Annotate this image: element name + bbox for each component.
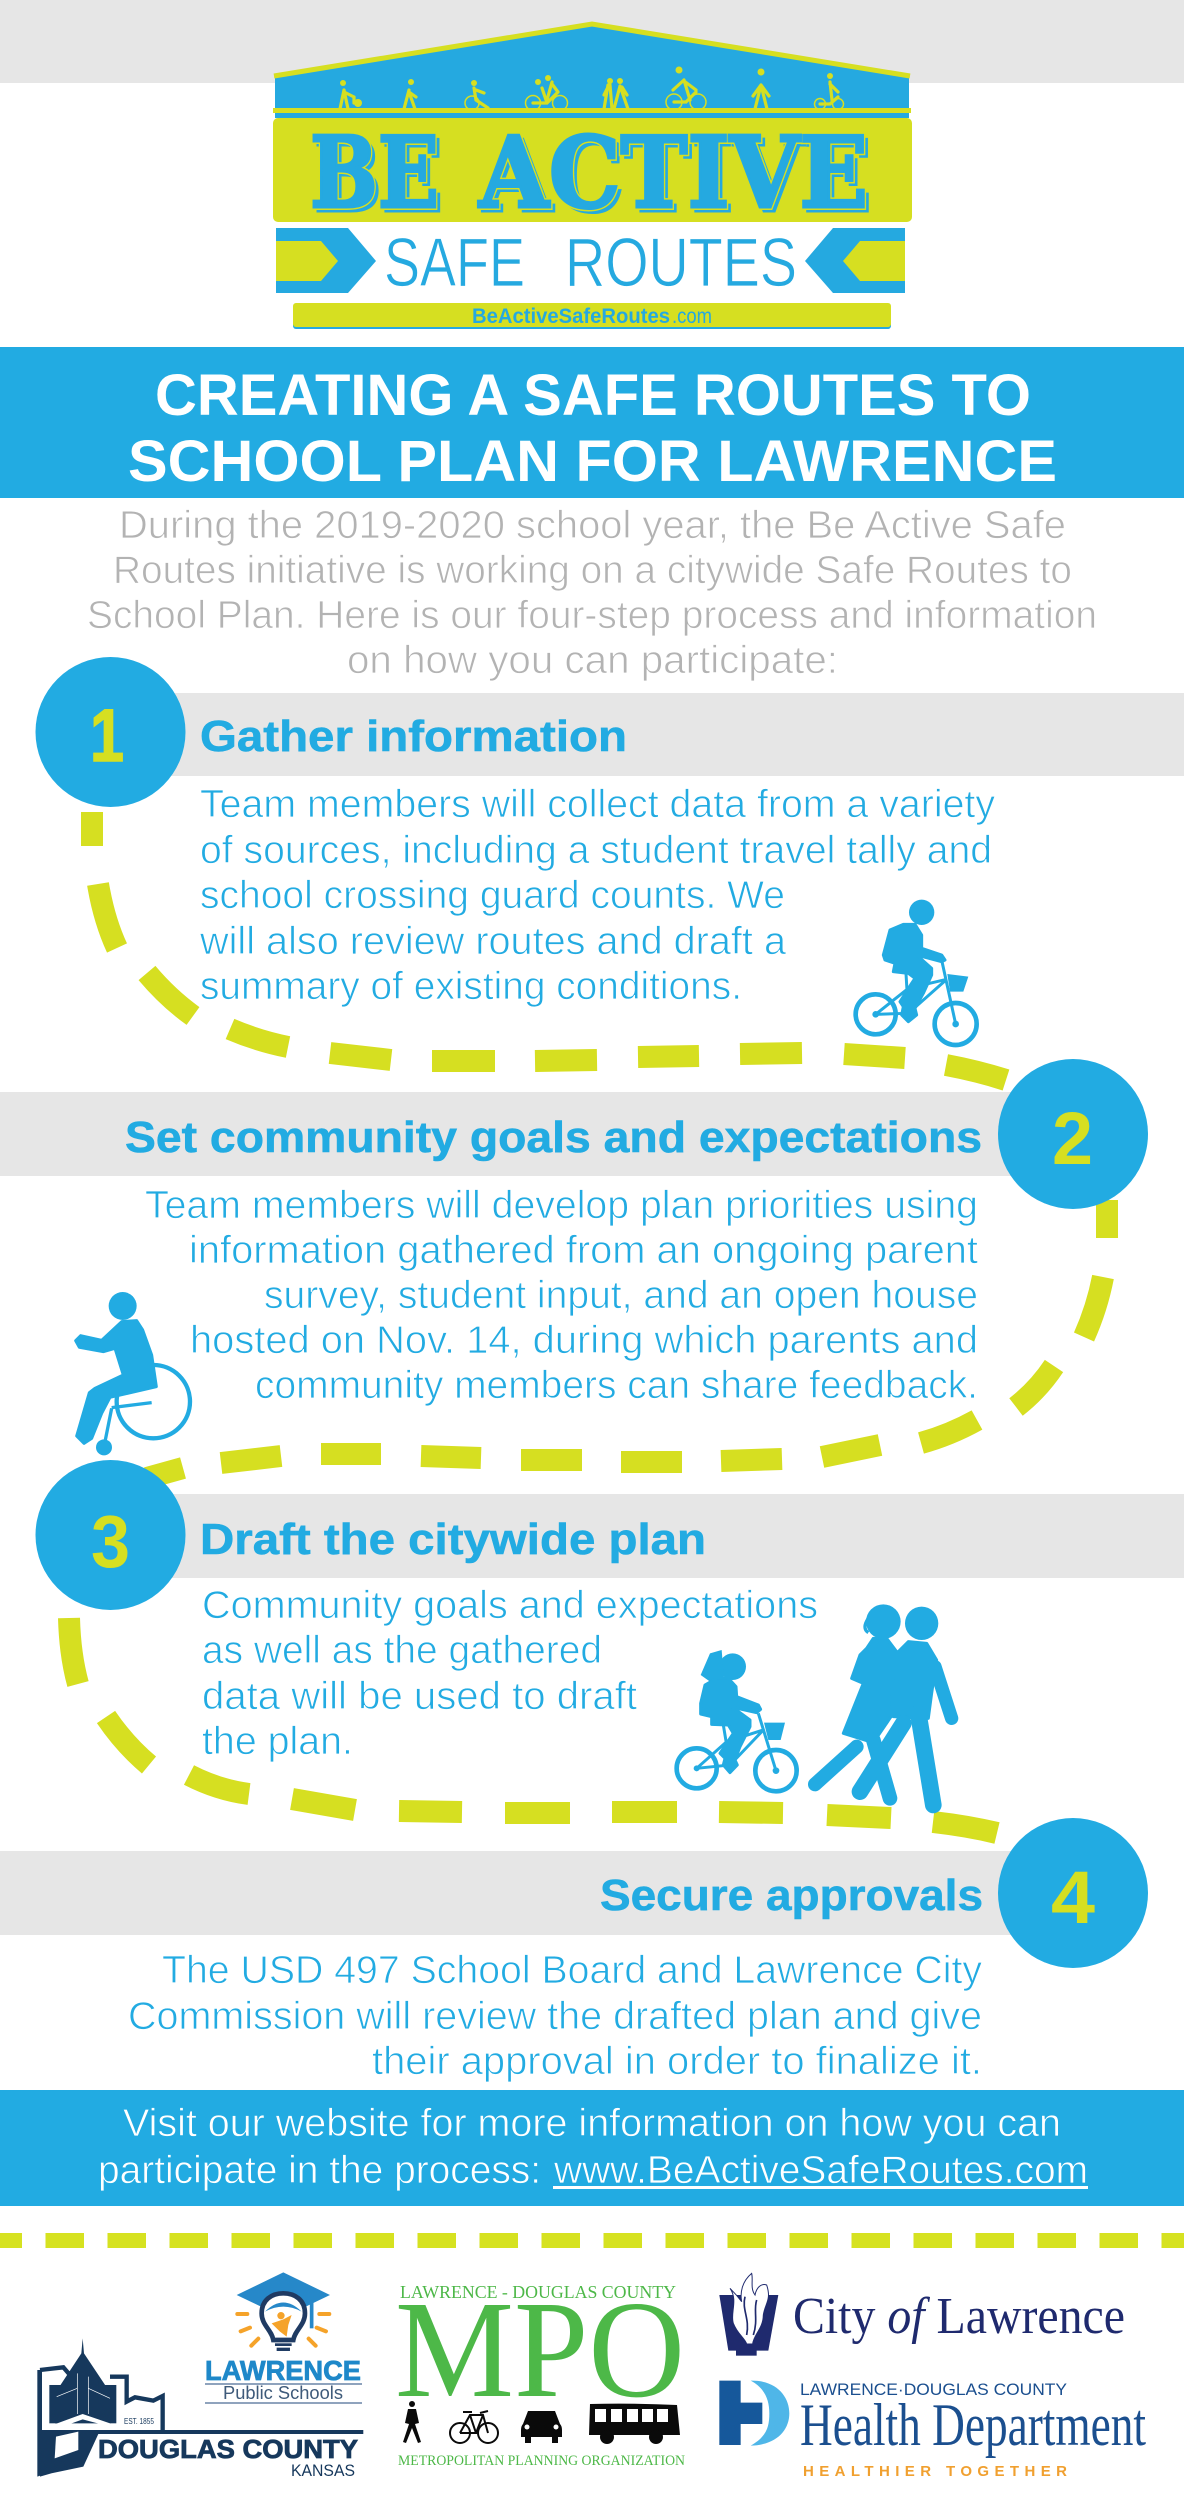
logo right chevron (805, 228, 905, 293)
logo URL bar: .com (672, 305, 712, 328)
logo wordmark: Be Active: ACTIVE (478, 116, 868, 231)
logo: Douglas County Kansas: DOUGLAS COUNTY (98, 2434, 358, 2464)
logo URL bar: BeActiveSafeRoutes (472, 305, 670, 328)
graduation cap and light bulb (237, 2272, 330, 2351)
logo: Lawrence Public Schools: Public Schools (223, 2383, 343, 2403)
logo: Lawrence-Douglas County MPO: MPO (395, 2273, 685, 2427)
heading bar 1 (110, 693, 1184, 776)
logo wordmark: Be Active: ACTIVE (478, 116, 868, 231)
step 1 body text: will also review routes and draft a (199, 920, 786, 963)
step 2 body text: survey, student input, and an open house (264, 1274, 978, 1317)
step 3 number circle (36, 1460, 186, 1610)
logo wordmark: Be Active: BE (314, 120, 443, 235)
step 4 number circle: 4 (1051, 1856, 1095, 1939)
logo: City of Lawrence: City of Lawrence (793, 2288, 1125, 2345)
logo pedestrians and cyclists (340, 66, 844, 110)
logo: Be Active Safe Routes (273, 24, 912, 329)
flame keystone emblem (719, 2273, 778, 2356)
title band: SCHOOL PLAN FOR LAWRENCE (128, 429, 1057, 494)
intro text: Routes initiative is working on a citywide Safe Routes to (113, 549, 1072, 592)
step 2 body text (145, 1184, 978, 1407)
step 1 number circle (36, 657, 186, 807)
step 3 body text: Community goals and expectations (202, 1584, 818, 1627)
logo left chevron (276, 228, 376, 293)
call to action band (0, 2090, 1184, 2206)
step 1 body text: summary of existing conditions. (200, 965, 742, 1008)
logo roof (273, 24, 911, 118)
logo: Lawrence Public Schools: LAWRENCE (205, 2355, 361, 2386)
step 4 heading: Secure approvals (600, 1871, 983, 1920)
step 3 body text: data will be used to draft (202, 1675, 637, 1718)
logo: Douglas County Kansas: EST. 1855 (124, 2417, 154, 2426)
health department emblem (719, 2381, 789, 2446)
step 2 body text: Team members will develop plan priorities using (145, 1184, 978, 1227)
logo wordmark: Safe Routes: ROUTES (565, 224, 797, 301)
logo: City of Lawrence (719, 2273, 1125, 2356)
step 2 number circle: 2 (1052, 1097, 1093, 1180)
step 4 body text (128, 1949, 982, 2083)
heading bar 3 (110, 1494, 1184, 1578)
step 4 body text: their approval in order to finalize it. (372, 2040, 982, 2083)
intro text: School Plan. Here is our four-step process and information (87, 594, 1097, 637)
dashed route path (69, 812, 1107, 1833)
icon: child on bicycle (677, 1650, 797, 1791)
intro text (87, 504, 1097, 682)
logo URL bar (293, 303, 891, 329)
icon: couple walking (815, 1604, 952, 1805)
call to action band: www.BeActiveSafeRoutes.com (553, 2149, 1088, 2192)
logo: Lawrence-Douglas County Health Department (719, 2380, 1146, 2480)
step 3 body text: the plan. (202, 1720, 353, 1763)
step 4 body text: Commission will review the drafted plan and give (128, 1995, 982, 2038)
logo: Lawrence-Douglas County MPO: METROPOLITAN PLANNING ORGANIZATION (398, 2453, 685, 2469)
logo: Lawrence-Douglas County Health Department: HEALTHIER TOGETHER (803, 2463, 1067, 2480)
step 1 body text: of sources, including a student travel tally and (200, 829, 992, 872)
step 4 number circle (998, 1818, 1148, 1968)
step 3 number circle: 3 (91, 1500, 130, 1583)
step 2 body text: community members can share feedback. (255, 1364, 978, 1407)
step 3 body text (202, 1584, 818, 1763)
logo wordmark: Be Active (310, 116, 872, 235)
intro text: During the 2019-2020 school year, the Be Active Safe (119, 504, 1066, 547)
step 1 heading: Gather information (200, 712, 627, 761)
logo yellow panel (273, 118, 912, 222)
logo wordmark: Be Active: ACTIVE (482, 120, 872, 235)
heading bar 4 (0, 1851, 1073, 1935)
logo wordmark: Be Active: BE (310, 116, 439, 231)
step 1 body text (199, 783, 995, 1008)
step 1 body text: Team members will collect data from a variety (200, 783, 995, 826)
icon: student on bicycle (856, 900, 977, 1045)
call to action band: Visit our website for more information on how you can (123, 2102, 1061, 2145)
step 3 heading: Draft the citywide plan (200, 1515, 706, 1564)
logo wordmark: Safe Routes: SAFE (384, 224, 525, 301)
intro text: on how you can participate: (347, 639, 838, 682)
step 1 body text: school crossing guard counts. We (200, 874, 785, 917)
top grey band (0, 0, 1184, 83)
logo wordmark: Be Active: BE (310, 116, 439, 231)
icon: wheelchair user (76, 1292, 190, 1455)
logo: Douglas County Kansas (37, 2338, 363, 2480)
step 4 body text: The USD 497 School Board and Lawrence City (162, 1949, 982, 1992)
step 3 body text: as well as the gathered (202, 1629, 602, 1672)
title band (0, 347, 1184, 498)
logo wordmark: Safe Routes (384, 224, 797, 301)
logo: Lawrence-Douglas County Health Department: LAWRENCE·DOUGLAS COUNTY (800, 2380, 1067, 2399)
title band: CREATING A SAFE ROUTES TO (155, 363, 1031, 428)
step 2 number circle (998, 1059, 1148, 1209)
logo: Lawrence Public Schools (205, 2272, 362, 2404)
heading bar 2 (0, 1092, 1073, 1176)
logo: Lawrence-Douglas County MPO: LAWRENCE - DOUGLAS COUNTY (400, 2282, 676, 2302)
call to action band: participate in the process: (98, 2149, 541, 2192)
courthouse and county outline (37, 2338, 363, 2477)
logo: Douglas County Kansas: KANSAS (291, 2461, 355, 2480)
step 2 body text: information gathered from an ongoing parent (189, 1229, 978, 1272)
transport icons (403, 2401, 680, 2444)
step 2 body text: hosted on Nov. 14, during which parents and (190, 1319, 978, 1362)
step 2 heading: Set community goals and expectations (125, 1113, 982, 1162)
step 1 number circle: 1 (90, 694, 124, 777)
